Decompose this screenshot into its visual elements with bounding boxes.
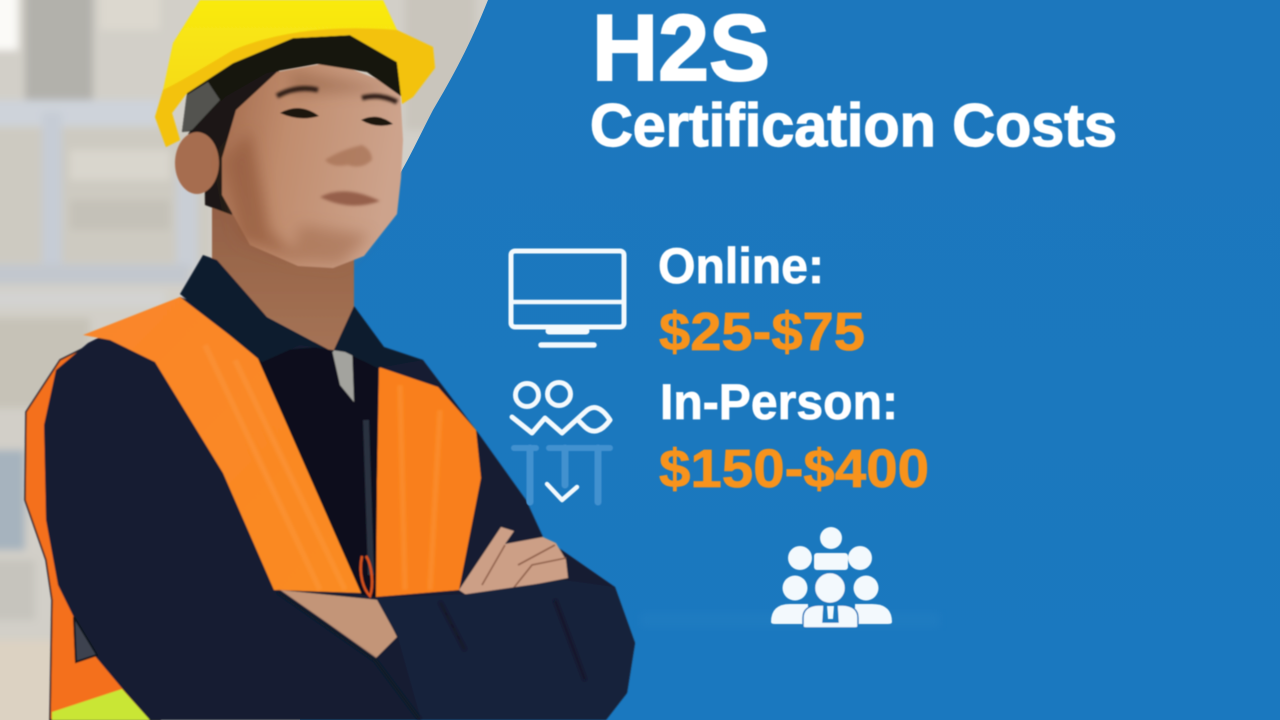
worker figure (25, 0, 635, 720)
worker: vest panel left of zip (83, 297, 362, 593)
photo background: industrial site (0, 0, 540, 720)
worker: hair (188, 66, 285, 215)
helmet brim shade (155, 28, 435, 147)
worker: vest pull cord (361, 556, 372, 596)
worker: vest panel right of zip (375, 367, 481, 597)
blue panel (300, 0, 1280, 720)
worker: right sleeve (376, 580, 635, 720)
face: right eye (361, 117, 393, 126)
icon: computer monitor (511, 251, 624, 345)
vest fold highlights (205, 345, 440, 590)
icon: in-person training (512, 382, 610, 433)
icon: group of people (771, 527, 892, 628)
worker: sleeve folds (278, 592, 585, 720)
worker: vest outer left strip (25, 345, 160, 720)
worker: dark inner shirt (255, 345, 378, 597)
worker: face (222, 62, 403, 268)
worker: helmet strap grey (182, 82, 220, 132)
worker: hand (459, 527, 568, 598)
face: mouth (320, 191, 380, 206)
light band at foot of panel (640, 612, 940, 628)
in-person price: $150-$400 (659, 439, 929, 499)
online price: $25-$75 (659, 302, 865, 362)
icon: down chevron (547, 484, 577, 500)
worker: reflective stripe (52, 689, 150, 720)
worker: collar (180, 255, 423, 368)
worker: vest armhole patch (74, 617, 97, 662)
title line: Certification Costs: Certification Costs (590, 92, 1117, 159)
worker: ear (175, 132, 219, 194)
face: left eye (280, 108, 319, 118)
face: brows (277, 88, 397, 102)
worker: zipper (366, 420, 371, 575)
in-person label: In-Person: (660, 374, 898, 430)
worker: forearm skin (280, 590, 397, 658)
worker: jacket body and left arm (44, 297, 635, 720)
icon: faded posts (514, 448, 610, 502)
worker: undershirt (332, 346, 354, 402)
cost row: online (511, 238, 865, 362)
worker: neck (212, 180, 354, 352)
face: nose (325, 145, 372, 167)
worker: yellow hard hat (155, 0, 435, 147)
hand: finger lines (482, 545, 566, 590)
title (590, 0, 1117, 159)
face: soft shading (225, 70, 395, 265)
cost row: in-person (512, 374, 929, 502)
online label: Online: (658, 238, 824, 294)
worker: helmet band (182, 35, 402, 132)
